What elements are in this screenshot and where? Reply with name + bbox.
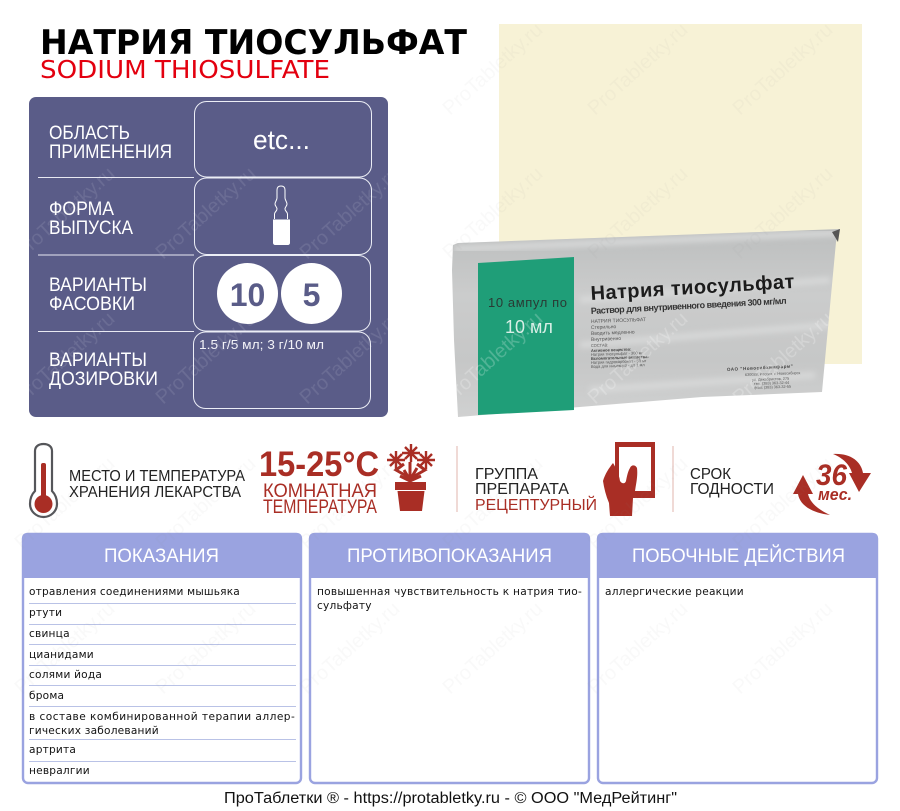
badge: 5 [281, 263, 342, 324]
text: ProTabletky.ru [729, 19, 837, 120]
list of indications: гических заболеваний [29, 725, 159, 737]
contraindications text: сульфату [317, 600, 372, 612]
subtitle: SODIUM THIOSULFATE [40, 55, 330, 84]
icon: shelf life arrows [793, 454, 871, 515]
list of indications: в составе комбинированной терапии аллер- [29, 711, 295, 723]
text: ProTabletky.ru [11, 163, 119, 264]
text: ProTabletky.ru [439, 598, 547, 699]
icon: shelf life arrows: 36 [816, 459, 847, 492]
package text: факс (383) 363-32-55 [754, 385, 791, 390]
panel: side effects [597, 533, 878, 783]
contraindications text [317, 586, 582, 612]
list of indications: отравления соединениями мышьяка [29, 586, 240, 598]
value: etc: etc... [253, 125, 310, 155]
label: release form: ФОРМА [49, 199, 114, 220]
label: application area: ОБЛАСТЬ [49, 123, 130, 144]
text: ProTabletky.ru [152, 163, 260, 264]
icon: shelf life arrows: мес. [818, 485, 852, 504]
contraindications text: повышенная чувствительность к натрия тио- [317, 586, 582, 598]
package text: ул. Декабристов, 275 [752, 377, 789, 382]
text: ProTabletky.ru [729, 598, 837, 699]
shelf life label: ГОДНОСТИ [690, 481, 774, 498]
text: ProTabletky.ru [296, 598, 404, 699]
package text: 630028, Россия, г. Новосибирск [745, 371, 801, 377]
package photo [452, 229, 840, 417]
package text: Вспомогательные вещества: [591, 354, 649, 361]
badge: 10 [217, 263, 278, 324]
text: ProTabletky.ru [296, 163, 404, 264]
icon: potted plant [387, 444, 435, 511]
badge: 5: 5 [303, 277, 320, 313]
panel: drug properties [29, 97, 388, 417]
package text: Натрия гидрокарбонат - 50 мг [591, 358, 647, 365]
list of indications: ртути [29, 607, 62, 619]
icon: thermometer [30, 444, 57, 517]
package text: СОСТАВ: [591, 342, 608, 348]
text: ProTabletky.ru [296, 308, 404, 409]
badge: 10: 10 [230, 277, 265, 313]
icon: ampoule [273, 186, 290, 245]
heading: indications: ПОКАЗАНИЯ [104, 545, 219, 567]
group label: РЕЦЕПТУРНЫЙ [475, 496, 597, 514]
list of indications: цианидами [29, 649, 94, 661]
group label: ПРЕПАРАТА [475, 481, 570, 498]
list of indications: невралгии [29, 765, 90, 777]
label: dosage line 2: ДОЗИРОВКИ [49, 369, 158, 390]
text: ProTabletky.ru [584, 598, 692, 699]
text: ProTabletky.ru [152, 453, 260, 554]
storage label [69, 468, 246, 501]
room temperature label: КОМНАТНАЯ [263, 480, 377, 502]
package text: Активное вещество: [591, 347, 632, 353]
label: dosage: ВАРИАНТЫ [49, 350, 147, 371]
package text [488, 271, 801, 390]
text: ProTabletky.ru [584, 19, 692, 120]
text: ProTabletky.ru [584, 163, 692, 264]
package text: Вводить медленно [591, 329, 635, 337]
room temperature label: ТЕМПЕРАТУРА [263, 496, 377, 518]
value: dosage: 1.5 г/5 мл; 3 г/10 мл [199, 337, 324, 352]
package text: Раствор для внутривенного введения 300 мг/мл [591, 296, 787, 316]
text: ProTabletky.ru [584, 453, 692, 554]
side effects text: аллергические реакции [605, 586, 744, 598]
label: packaging line 2: ФАСОВКИ [49, 294, 135, 315]
package text: Вода для инъекций - до 1 мл [591, 362, 645, 369]
divider [457, 446, 673, 512]
package text: 10 мл [505, 317, 553, 337]
package text: 10 ампул по [488, 295, 567, 310]
text: ProTabletky.ru [439, 163, 547, 264]
text: ProTabletky.ru [729, 163, 837, 264]
panel: contraindications [309, 533, 590, 783]
heading: contraindications: ПРОТИВОПОКАЗАНИЯ [347, 545, 552, 567]
shelf life label: СРОК [690, 466, 731, 483]
package text: Внутривенно [591, 336, 621, 343]
package text: Стерильно [591, 324, 617, 331]
text: ProTabletky.ru [584, 308, 692, 409]
package text: НАТРИЯ ТИОСУЛЬФАТ [591, 317, 646, 325]
panel: indications [22, 533, 302, 783]
footer: ПроТаблетки ® - https://protabletky.ru - © ООО "МедРейтинг" [224, 790, 677, 807]
package text: тел. (383) 363-32-44 [754, 381, 789, 386]
storage label: ХРАНЕНИЯ ЛЕКАРСТВА [69, 484, 242, 501]
package text: ОАО "Новосибхимфарм" [727, 363, 793, 372]
group label [475, 466, 597, 514]
title: НАТРИЯ ТИОСУЛЬФАТ [40, 23, 467, 62]
list of indications: артрита [29, 744, 76, 756]
text: ProTabletky.ru [729, 308, 837, 409]
text: ProTabletky.ru [152, 308, 260, 409]
storage label: МЕСТО И ТЕМПЕРАТУРА [69, 468, 246, 485]
icon: hand holding prescription [603, 442, 655, 516]
list of indications: брома [29, 690, 64, 702]
list of indications: солями йода [29, 669, 102, 681]
text: ProTabletky.ru [11, 453, 119, 554]
text: ProTabletky.ru [439, 19, 547, 120]
text: ProTabletky.ru [729, 453, 837, 554]
text: ProTabletky.ru [439, 453, 547, 554]
list of indications [29, 586, 295, 777]
text: ProTabletky.ru [11, 308, 119, 409]
temperature value: 15-25°C [259, 445, 379, 484]
list of indications: свинца [29, 628, 70, 640]
label: application area line 2: ПРИМЕНЕНИЯ [49, 142, 172, 163]
label: release form line 2: ВЫПУСКА [49, 218, 133, 239]
text: ProTabletky.ru [152, 598, 260, 699]
text: ProTabletky.ru [296, 453, 404, 554]
heading: side effects: ПОБОЧНЫЕ ДЕЙСТВИЯ [632, 543, 845, 567]
room temperature label [263, 480, 377, 518]
text: ProTabletky.ru [11, 598, 119, 699]
text: ProTabletky.ru [439, 308, 547, 409]
cream background panel [499, 24, 862, 364]
group label: ГРУППА [475, 466, 539, 483]
package text: Натрия тиосульфат - 300 мг [591, 350, 644, 357]
shelf life label [690, 466, 774, 498]
label: packaging: ВАРИАНТЫ [49, 275, 147, 296]
package text: Натрия тиосульфат [590, 271, 795, 305]
